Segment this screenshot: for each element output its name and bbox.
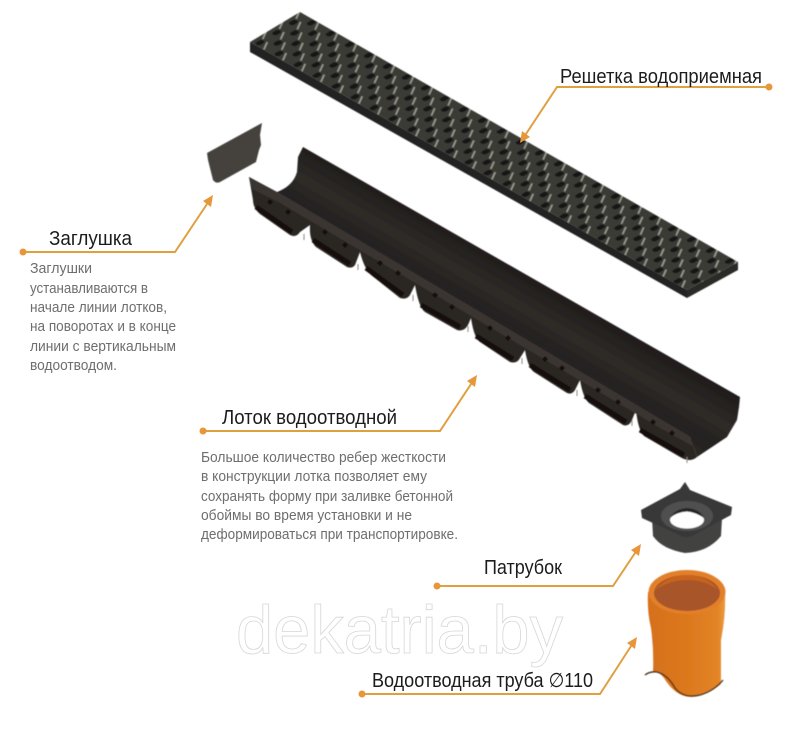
watermark: dekatria.by — [236, 592, 563, 668]
description: на поворотах и в конце — [30, 318, 176, 335]
heading: Водоотводная труба ∅110 — [372, 670, 593, 692]
pipe: orange pipe — [645, 570, 726, 697]
description: Большое количество ребер жесткости — [201, 449, 446, 466]
arrowhead — [467, 375, 477, 387]
description: деформироваться при транспортировке. — [201, 526, 458, 543]
arrowhead — [627, 637, 637, 649]
callout: outlet — [434, 544, 641, 590]
description — [30, 260, 176, 374]
arrowhead — [631, 544, 641, 556]
anchor dot — [434, 582, 440, 590]
rib diamonds — [267, 199, 675, 436]
heading: Решетка водоприемная — [560, 66, 762, 88]
description: начале линии лотков, — [30, 299, 167, 316]
heading: Заглушка — [49, 228, 133, 250]
leader line — [203, 378, 475, 431]
anchor dot — [200, 428, 206, 434]
callout: channel — [200, 375, 477, 543]
anchor dot — [358, 690, 366, 698]
description: водоотводом. — [30, 357, 117, 374]
arrowhead — [203, 195, 213, 207]
description — [201, 449, 458, 543]
description: устанавливаются в — [30, 280, 148, 297]
anchor dot — [766, 84, 772, 90]
rib ticks — [304, 234, 687, 463]
end cap — [207, 123, 262, 183]
leader line — [437, 547, 639, 586]
arrowhead — [520, 131, 530, 143]
channel: drainage tray — [249, 147, 740, 463]
description: обоймы во время установки и не — [201, 507, 412, 524]
leader line — [23, 198, 211, 252]
scallop undersides — [256, 207, 684, 455]
channel outer ribs — [249, 177, 697, 460]
description: Заглушки — [30, 260, 92, 277]
description: в конструкции лотка позволяет ему — [201, 468, 427, 485]
channel inner surface — [277, 147, 740, 457]
heading: Лоток водоотводной — [222, 407, 397, 429]
outlet fitting — [641, 482, 732, 553]
leader line — [362, 640, 635, 694]
heading: Патрубок — [484, 557, 562, 579]
callout: end cap — [20, 195, 213, 374]
description: линии с вертикальным — [30, 338, 176, 355]
grate: drainage grating — [250, 12, 738, 298]
anchor dot — [20, 248, 26, 256]
channel rim — [249, 177, 694, 447]
description: сохранять форму при заливке бетонной — [201, 488, 453, 505]
leader line — [522, 87, 769, 140]
callout: grating — [520, 66, 772, 143]
callout: pipe — [358, 637, 637, 698]
